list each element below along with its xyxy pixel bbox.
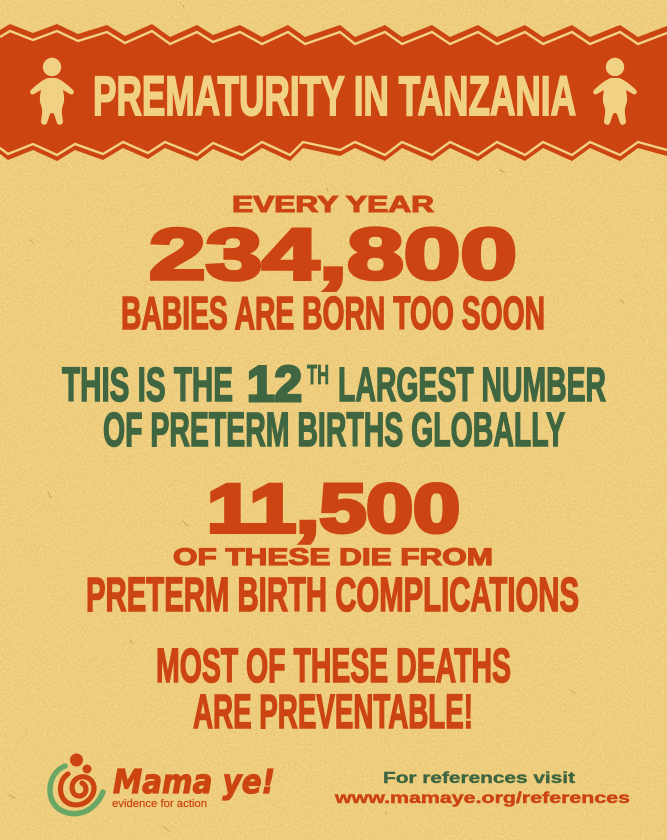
- references url: www.mamaye.org/references: [334, 790, 630, 807]
- closing statement: [156, 640, 511, 739]
- logo: Mama Ye: [50, 754, 275, 814]
- top cream zigzag line: [0, 31, 667, 44]
- bottom cream zigzag line: [0, 142, 667, 155]
- references label: For references visit: [383, 770, 576, 787]
- every year label: EVERY YEAR: [232, 191, 435, 217]
- this is the: THIS IS THE: [62, 359, 233, 412]
- rank 12: 12: [247, 356, 302, 412]
- are preventable: ARE PREVENTABLE!: [193, 686, 473, 739]
- icon: baby left: [30, 58, 74, 125]
- of these die from: OF THESE DIE FROM: [173, 544, 493, 571]
- logo mark: [50, 754, 103, 814]
- header banner: [0, 24, 667, 161]
- global ranking statement: [62, 356, 606, 457]
- th superscript: TH: [307, 359, 329, 390]
- references note: [334, 770, 630, 807]
- big number: 234,800: 234,800: [149, 215, 517, 295]
- icon: baby right: [593, 58, 637, 125]
- wordmark: Mama ye!: [113, 762, 275, 801]
- zigzag red ribbon: [0, 24, 667, 161]
- tagline: evidence for action: [112, 798, 207, 810]
- big number: 11,500: 11,500: [207, 470, 460, 547]
